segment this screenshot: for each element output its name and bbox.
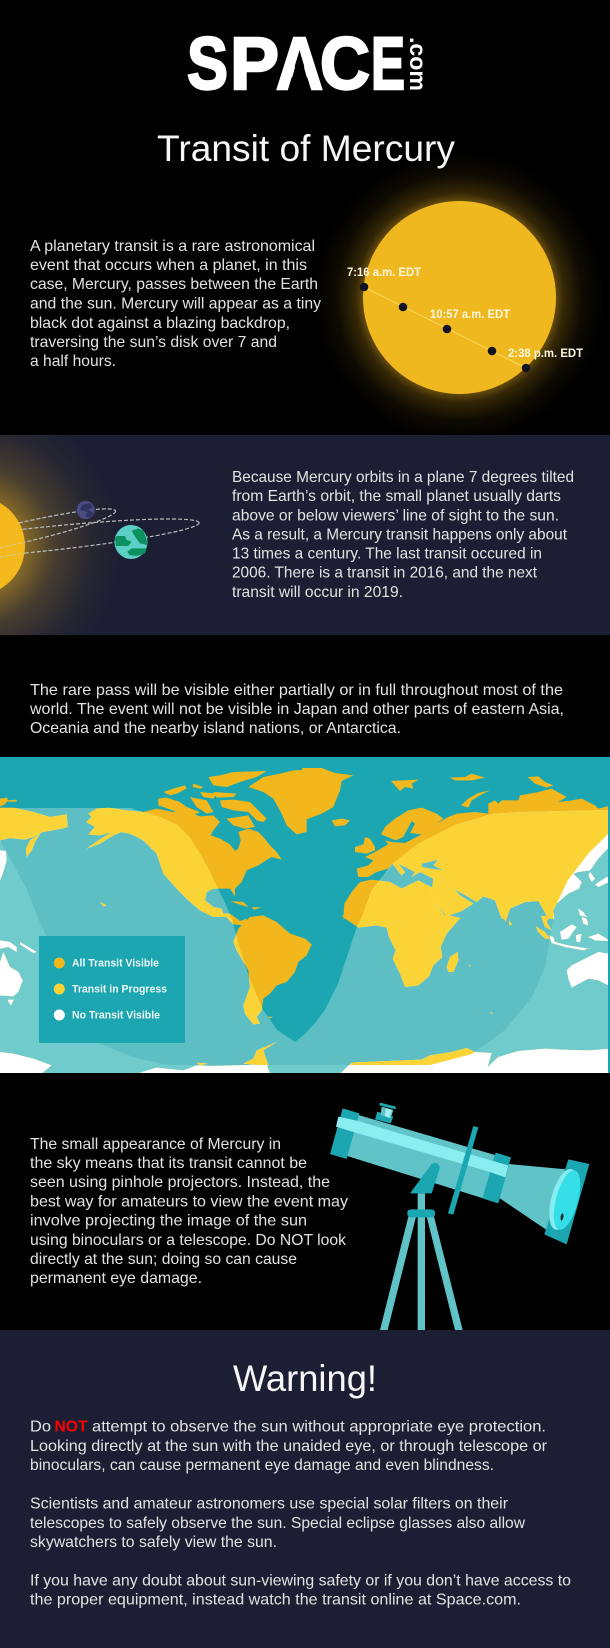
visibility text block: The rare pass will be visible either partially or in full throughout most of the (30, 682, 563, 699)
orbit text block: As a result, a Mercury transit happens only about (232, 526, 568, 544)
visibility text block: world. The event will not be visible in Japan and other parts of eastern Asia, (29, 701, 564, 718)
logo: Space.com: C (320, 22, 370, 105)
orbit text block: Because Mercury orbits in a plane 7 degrees tilted (232, 469, 574, 486)
viewing text block: the sky means that its transit cannot be (30, 1155, 307, 1172)
transit line (364, 287, 526, 368)
intro text block: event that occurs when a planet, in this (30, 257, 307, 274)
time labels: 7:16 a.m. EDT (347, 265, 422, 279)
world map of transit visibility (0, 757, 610, 1074)
Earth planet (114, 525, 148, 559)
panel: orbit explanation (0, 435, 610, 635)
map legend: All Transit Visible (72, 958, 159, 970)
warning text block: Looking directly at the sun with the unaided eye, or through telescope or (30, 1438, 548, 1455)
eyepiece (375, 1103, 396, 1123)
time labels: 10:57 a.m. EDT (430, 307, 511, 321)
mount (410, 1163, 440, 1193)
intro text block: a half hours. (30, 353, 116, 370)
viewing text block: directly at the sun; doing so can cause (30, 1251, 297, 1268)
focus ring (448, 1126, 478, 1215)
map legend: Transit in Progress (72, 984, 167, 996)
viewing text block: involve projecting the image of the sun (30, 1212, 307, 1230)
warning text block: Do (30, 1418, 51, 1436)
warning text block: binoculars, can cause permanent eye damage and even blindness. (30, 1457, 494, 1474)
front lens plate (544, 1159, 589, 1244)
time labels (347, 265, 584, 360)
intro text block: traversing the sun’s disk over 7 and (30, 334, 277, 351)
warning text block: the proper equipment, instead watch the transit online at Space.com. (30, 1592, 521, 1608)
map legend (39, 936, 185, 1043)
logo: Space.com: .com (405, 37, 431, 91)
logo: Space.com (187, 22, 431, 105)
logo: Space.com: A (276, 22, 323, 105)
warning text block: Scientists and amateur astronomers use special solar filters on their (30, 1496, 509, 1512)
tube (330, 1108, 567, 1230)
logo: Space.com: E (371, 22, 405, 105)
intro text block: A planetary transit is a rare astronomical (30, 238, 315, 255)
sun glow and disk (326, 165, 592, 430)
orbit text block: transit will occur in 2019. (232, 584, 403, 601)
warning text block: telescopes to safely observe the sun. Special eclipse glasses also allow (30, 1515, 525, 1532)
intro text block (30, 238, 321, 370)
viewing text block: permanent eye damage. (30, 1270, 202, 1287)
intro text block: and the sun. Mercury will appear as a tiny (30, 296, 321, 312)
orbit text block: 13 times a century. The last transit occured in (232, 546, 542, 562)
logo: Space.com: S (187, 22, 228, 105)
Mercury planet (77, 501, 95, 519)
telescope illustration (330, 1103, 589, 1330)
orbit diagram (0, 435, 200, 635)
map legend: No Transit Visible (72, 1010, 160, 1022)
viewing text block: best way for amateurs to view the event may (30, 1194, 348, 1210)
warning text block: If you have any doubt about sun-viewing safety or if you don’t have access to (30, 1572, 571, 1590)
warning heading: Warning! (233, 1358, 377, 1399)
sun with Mercury transit path (326, 165, 592, 430)
orbit text block: 2006. There is a transit in 2016, and the next (232, 564, 538, 582)
visibility text block: Oceania and the nearby island nations, or Antarctica. (30, 720, 401, 737)
orbit text block (232, 469, 574, 601)
time labels: 2:38 p.m. EDT (508, 346, 584, 360)
orbit text block: above or below viewers’ line of sight to the sun. (232, 508, 559, 524)
warning text block: NOT (54, 1418, 88, 1436)
intro text block: case, Mercury, passes between the Earth (30, 276, 318, 293)
viewing text block (30, 1136, 348, 1287)
Mercury positions (360, 283, 530, 372)
warning text block: attempt to observe the sun without appropriate eye protection. (92, 1418, 546, 1436)
logo: Space.com: P (230, 22, 279, 105)
title: Transit of Mercury (157, 128, 455, 169)
warning text block (30, 1418, 571, 1608)
tripod (380, 1193, 463, 1330)
viewing text block: using binoculars or a telescope. Do NOT look (30, 1232, 347, 1249)
intro text block: black dot against a blazing backdrop, (30, 315, 290, 332)
warning text block: skywatchers to safely view the sun. (30, 1534, 277, 1551)
orbit text block: from Earth’s orbit, the small planet usually darts (232, 488, 561, 505)
viewing text block: seen using pinhole projectors. Instead, the (30, 1174, 330, 1191)
panel: warning (0, 1330, 610, 1648)
visibility text block (29, 682, 564, 737)
viewing text block: The small appearance of Mercury in (30, 1136, 281, 1153)
